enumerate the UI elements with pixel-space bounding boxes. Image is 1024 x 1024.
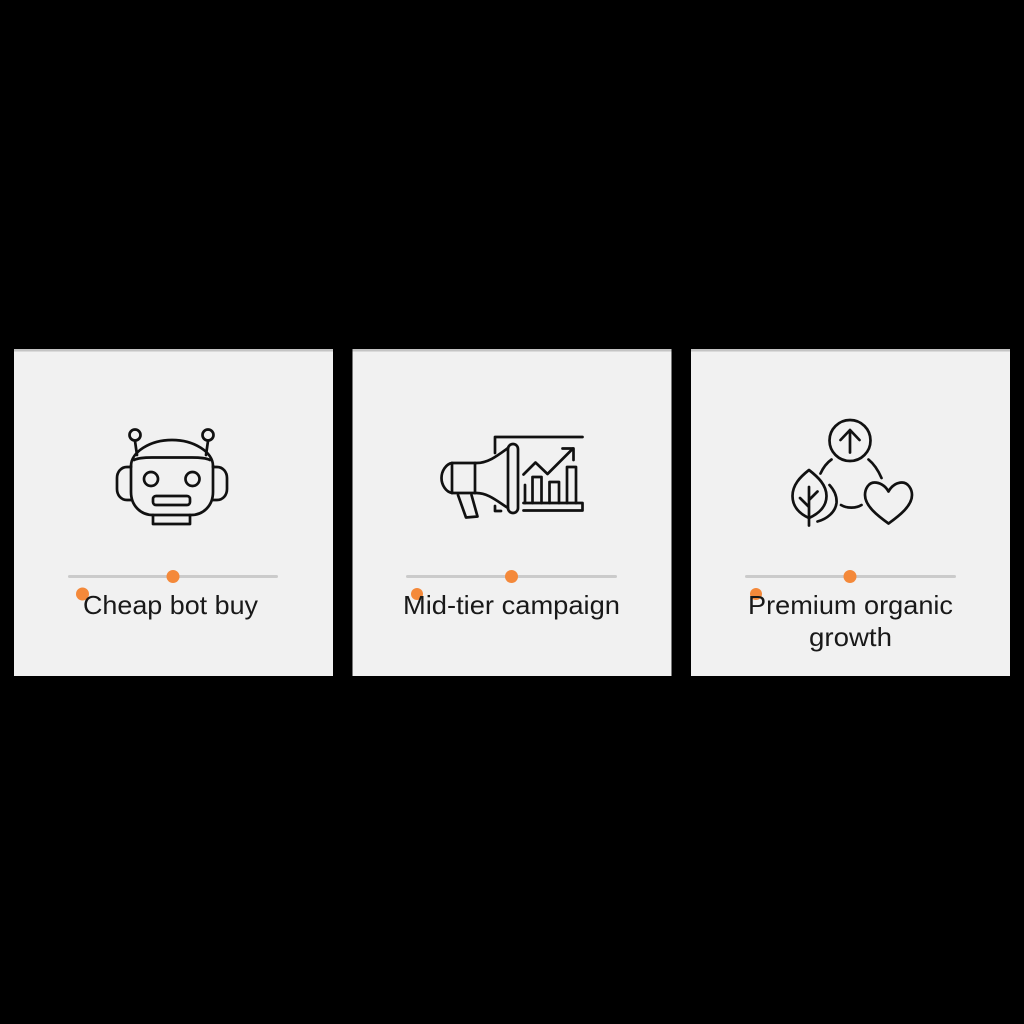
label: premium organic growth: Premium organic [748, 590, 953, 620]
label: mid-tier campaign: Mid-tier campaign [403, 590, 620, 620]
label: premium organic growth [748, 590, 953, 652]
panel: cheap bot buy [14, 349, 333, 676]
icon: growth cycle [792, 420, 912, 526]
marker dot [750, 588, 762, 600]
label: cheap bot buy: Cheap bot buy [83, 590, 258, 620]
panel: premium organic growth [691, 349, 1010, 676]
slider: cheap bot buy [68, 570, 278, 583]
panel: mid-tier campaign [352, 349, 672, 676]
slider: mid-tier campaign [406, 570, 617, 583]
label: premium organic growth: growth [809, 622, 892, 652]
icon: robot [117, 430, 227, 524]
slider: premium organic growth [745, 570, 956, 583]
marker dot [411, 588, 423, 600]
marker dot [76, 588, 89, 600]
icon: megaphone and chart [442, 437, 582, 518]
